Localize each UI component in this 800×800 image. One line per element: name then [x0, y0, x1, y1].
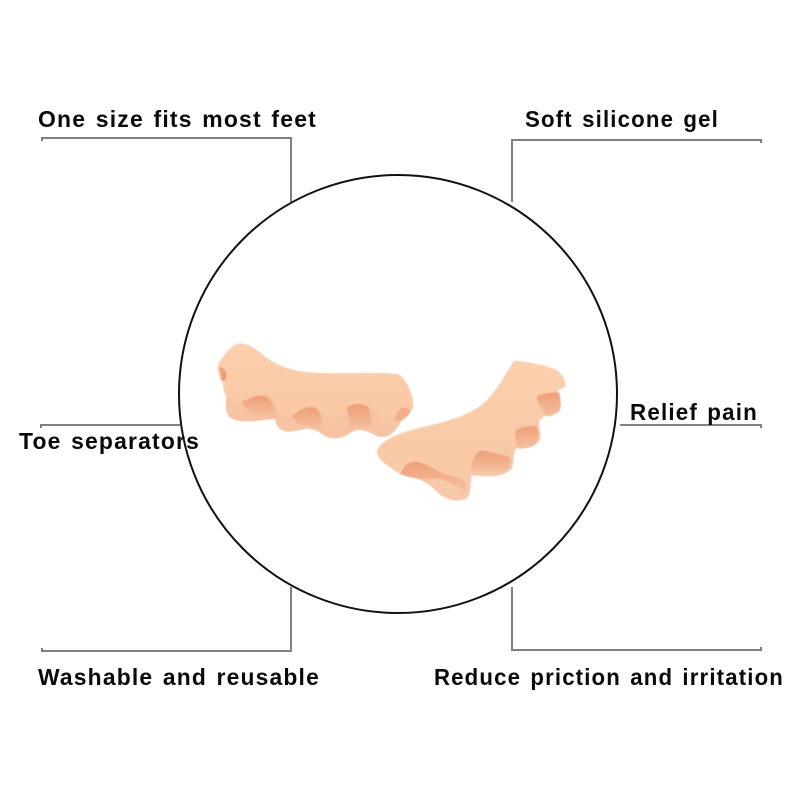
label: one size fits most feet: One size fits most feet — [38, 106, 317, 132]
right recess 3 — [515, 426, 538, 448]
right recess 2 — [472, 451, 511, 472]
product circle — [179, 175, 617, 613]
connector: soft silicone gel — [512, 140, 761, 202]
right separator lower layer — [403, 390, 561, 501]
label: reduce priction and irritation: Reduce priction and irritation — [434, 664, 784, 690]
right recess 4 — [536, 393, 560, 416]
connector: toe separators — [41, 425, 180, 428]
right toe separator — [377, 361, 565, 501]
left separator lower layer — [226, 393, 407, 438]
label: relief pain: Relief pain — [630, 399, 758, 425]
connector: reduce priction and irritation — [512, 587, 761, 650]
label: soft silicone gel: Soft silicone gel — [525, 106, 719, 132]
left separator end hole — [394, 407, 411, 421]
connector: washable and reusable — [42, 587, 291, 651]
left recess 2 — [292, 407, 323, 430]
left separator top layer — [218, 343, 413, 418]
label: washable and reusable: Washable and reusable — [38, 664, 320, 690]
left recess 1 — [242, 396, 277, 417]
right separator top layer — [377, 361, 565, 477]
label: toe separators: Toe separators — [19, 428, 200, 454]
left toe separator — [218, 343, 413, 438]
connector: relief pain — [620, 425, 761, 428]
left recess 3 — [347, 404, 372, 429]
right recess 1 — [400, 462, 466, 492]
connector: one size fits most feet — [42, 138, 291, 202]
left separator hole — [219, 367, 227, 381]
